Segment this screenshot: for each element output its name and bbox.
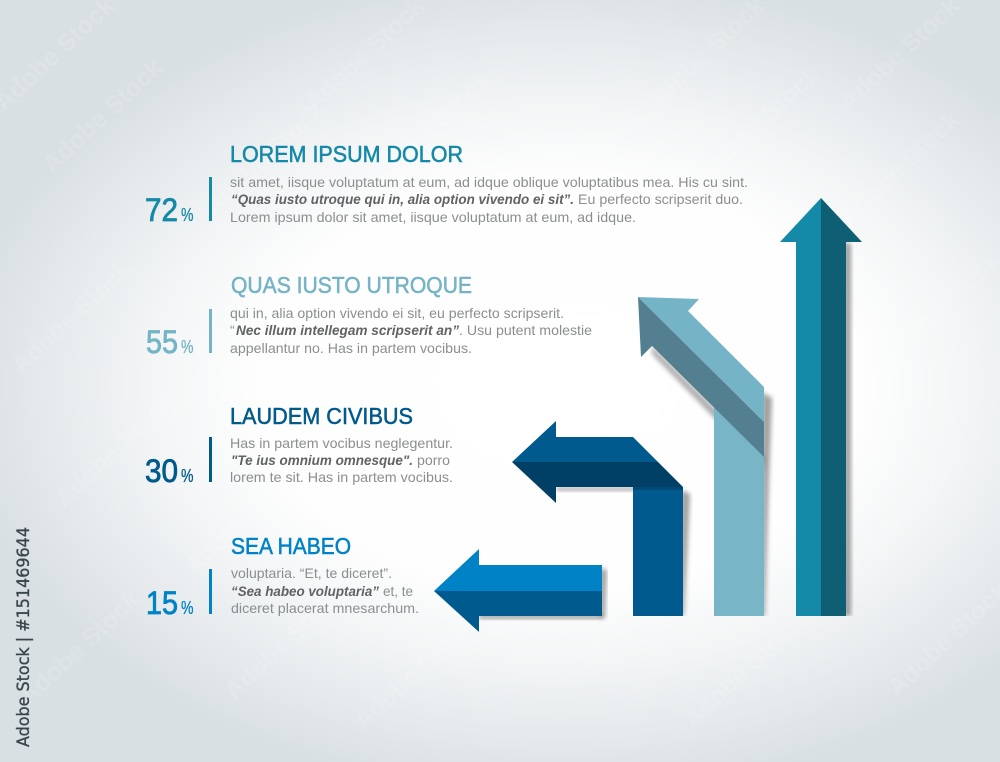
percent sign: % (181, 597, 194, 618)
percentage 15: 15 (146, 585, 178, 621)
body text: voluptaria. “Et, te diceret”. (231, 565, 392, 581)
watermarks: Adobe Stock (379, 401, 510, 525)
body text: lorem te sit. Has in partem vocibus. (230, 469, 453, 485)
body text: . Usu putent molestie (459, 322, 592, 338)
heading: LAUDEM CIVIBUS (230, 403, 413, 429)
watermarks: Adobe Stock (674, 281, 805, 405)
watermarks: Adobe Stock (841, 448, 972, 572)
heading: SEA HABEO (231, 533, 351, 559)
percentage 55: 55 (146, 324, 178, 360)
body text: “ (230, 322, 235, 338)
heading: QUAS IUSTO UTROQUE (231, 272, 472, 298)
arrow: tall teal arrow up (780, 198, 862, 616)
body text (231, 565, 419, 616)
percent sign: % (181, 336, 194, 357)
arrow: light blue bent arrow (638, 297, 772, 616)
watermarks: Adobe Stock (508, 437, 639, 561)
watermarks: Adobe Stock (212, 231, 343, 355)
percentage 30: 30 (145, 453, 178, 489)
watermarks: Adobe Stock (551, 566, 682, 690)
watermarks: Adobe Stock (37, 54, 168, 178)
arrow: bright blue arrow left (434, 549, 607, 632)
watermarks: Adobe Stock (519, 101, 650, 225)
watermarks: Adobe Stock (541, 241, 672, 365)
body text: Nec illum intellegam scripserit an” (236, 322, 459, 338)
watermarks: Adobe Stock (219, 581, 350, 705)
section: lorem ipsum dolor 72% (145, 141, 748, 228)
percentage 72: 72 (145, 192, 178, 228)
watermarks: Adobe Stock (834, 106, 965, 230)
bar (209, 569, 212, 614)
watermarks: Adobe Stock (6, 255, 137, 379)
watermarks: Adobe Stock (366, 66, 497, 190)
bar (209, 177, 212, 221)
watermarks: Adobe Stock (179, 456, 310, 580)
watermarks: Adobe Stock (14, 586, 145, 710)
body text: qui in, alia option vivendo ei sit, eu perfecto scripserit. (230, 305, 564, 321)
body text: porro (417, 452, 450, 468)
body text: sit amet, iisque voluptatum at eum, ad idque oblique voluptatibus mea. His cu sint. (230, 174, 748, 190)
section: quas iusto utroque 55% (146, 272, 592, 360)
section: laudem civibus 30% (145, 403, 453, 489)
watermarks: Adobe Stock (199, 96, 330, 220)
body text: "Te ius omnium omnesque". (231, 452, 413, 468)
section: sea habeo 15% (146, 533, 419, 621)
body text: Lorem ipsum dolor sit amet, iisque voluptatum at eum, ad idque. (230, 209, 636, 225)
arrow: dark blue bent arrow (512, 421, 690, 616)
body text: “Quas iusto utroque qui in, alia option vivendo ei sit”. (231, 191, 574, 207)
body text: “Sea habeo voluptaria” (231, 583, 379, 599)
percent sign: % (181, 465, 194, 486)
body text: diceret placerat mnesarchum. (231, 600, 419, 616)
body text: et, te (383, 583, 413, 599)
watermarks: Adobe Stock (694, 61, 825, 185)
body text: Eu perfecto scripserit duo. (578, 191, 743, 207)
watermarks: Adobe Stock (714, 407, 845, 531)
heading: LOREM IPSUM DOLOR (230, 141, 463, 167)
body text: Has in partem vocibus neglegentur. (230, 435, 453, 451)
watermarks: Adobe Stock (349, 611, 480, 735)
bar (209, 437, 212, 482)
watermarks: Adobe Stock (678, 609, 809, 733)
body text (230, 435, 453, 485)
body text (230, 305, 592, 356)
percent sign: % (181, 204, 194, 225)
vertical stock id label: Adobe Stock | #151469644 (14, 527, 34, 747)
watermarks: Adobe Stock (49, 388, 180, 512)
body text (230, 174, 748, 225)
bar (209, 309, 212, 353)
body text: appellantur no. Has in partem vocibus. (230, 340, 472, 356)
